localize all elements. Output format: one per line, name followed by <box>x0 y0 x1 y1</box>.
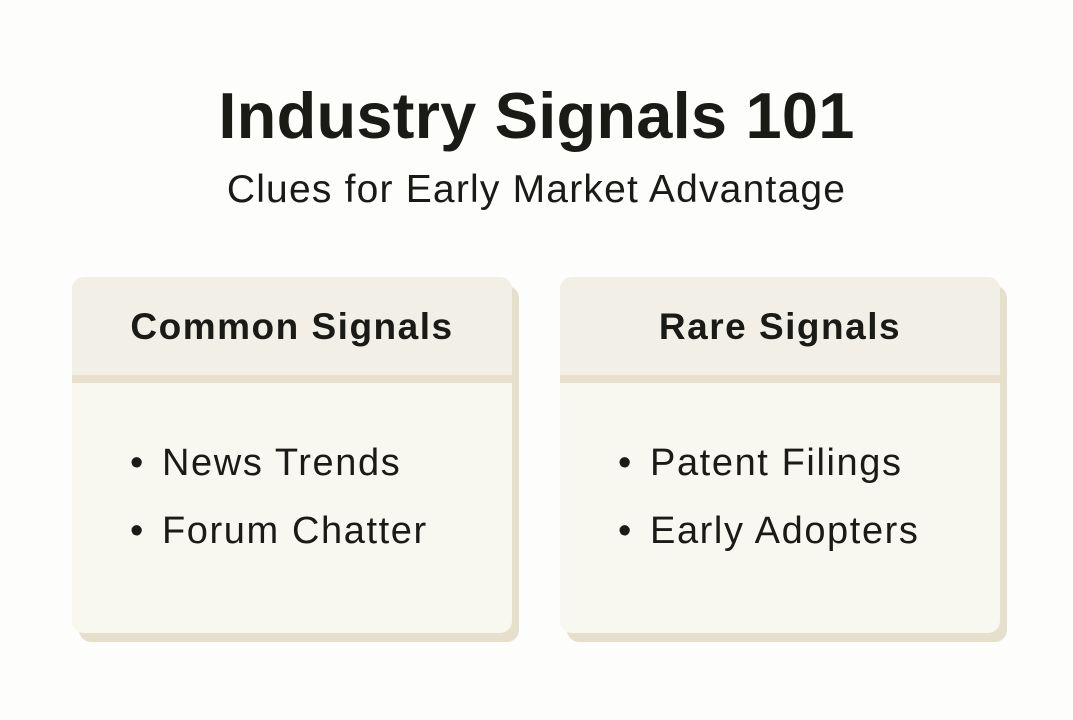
list: common signals: Forum Chatter <box>162 510 428 552</box>
list: common signals: News Trends <box>162 442 401 484</box>
subtitle: Clues for Early Market Advantage <box>227 168 846 211</box>
heading: common signals <box>72 277 512 383</box>
panel: rare signals <box>560 277 1007 642</box>
list: common signals: • <box>130 510 145 552</box>
list: rare signals: • <box>618 510 633 552</box>
heading: rare signals: Rare Signals <box>659 306 901 347</box>
list: common signals <box>130 442 428 552</box>
list: rare signals: Early Adopters <box>650 510 920 552</box>
list: rare signals <box>618 442 920 552</box>
list: common signals: • <box>130 442 145 484</box>
list: rare signals: • <box>618 442 633 484</box>
heading: rare signals <box>560 277 1000 383</box>
list: rare signals: Patent Filings <box>650 442 903 484</box>
heading: common signals: Common Signals <box>130 306 454 347</box>
title: Industry Signals 101 <box>218 79 855 152</box>
panel: common signals <box>72 277 519 642</box>
